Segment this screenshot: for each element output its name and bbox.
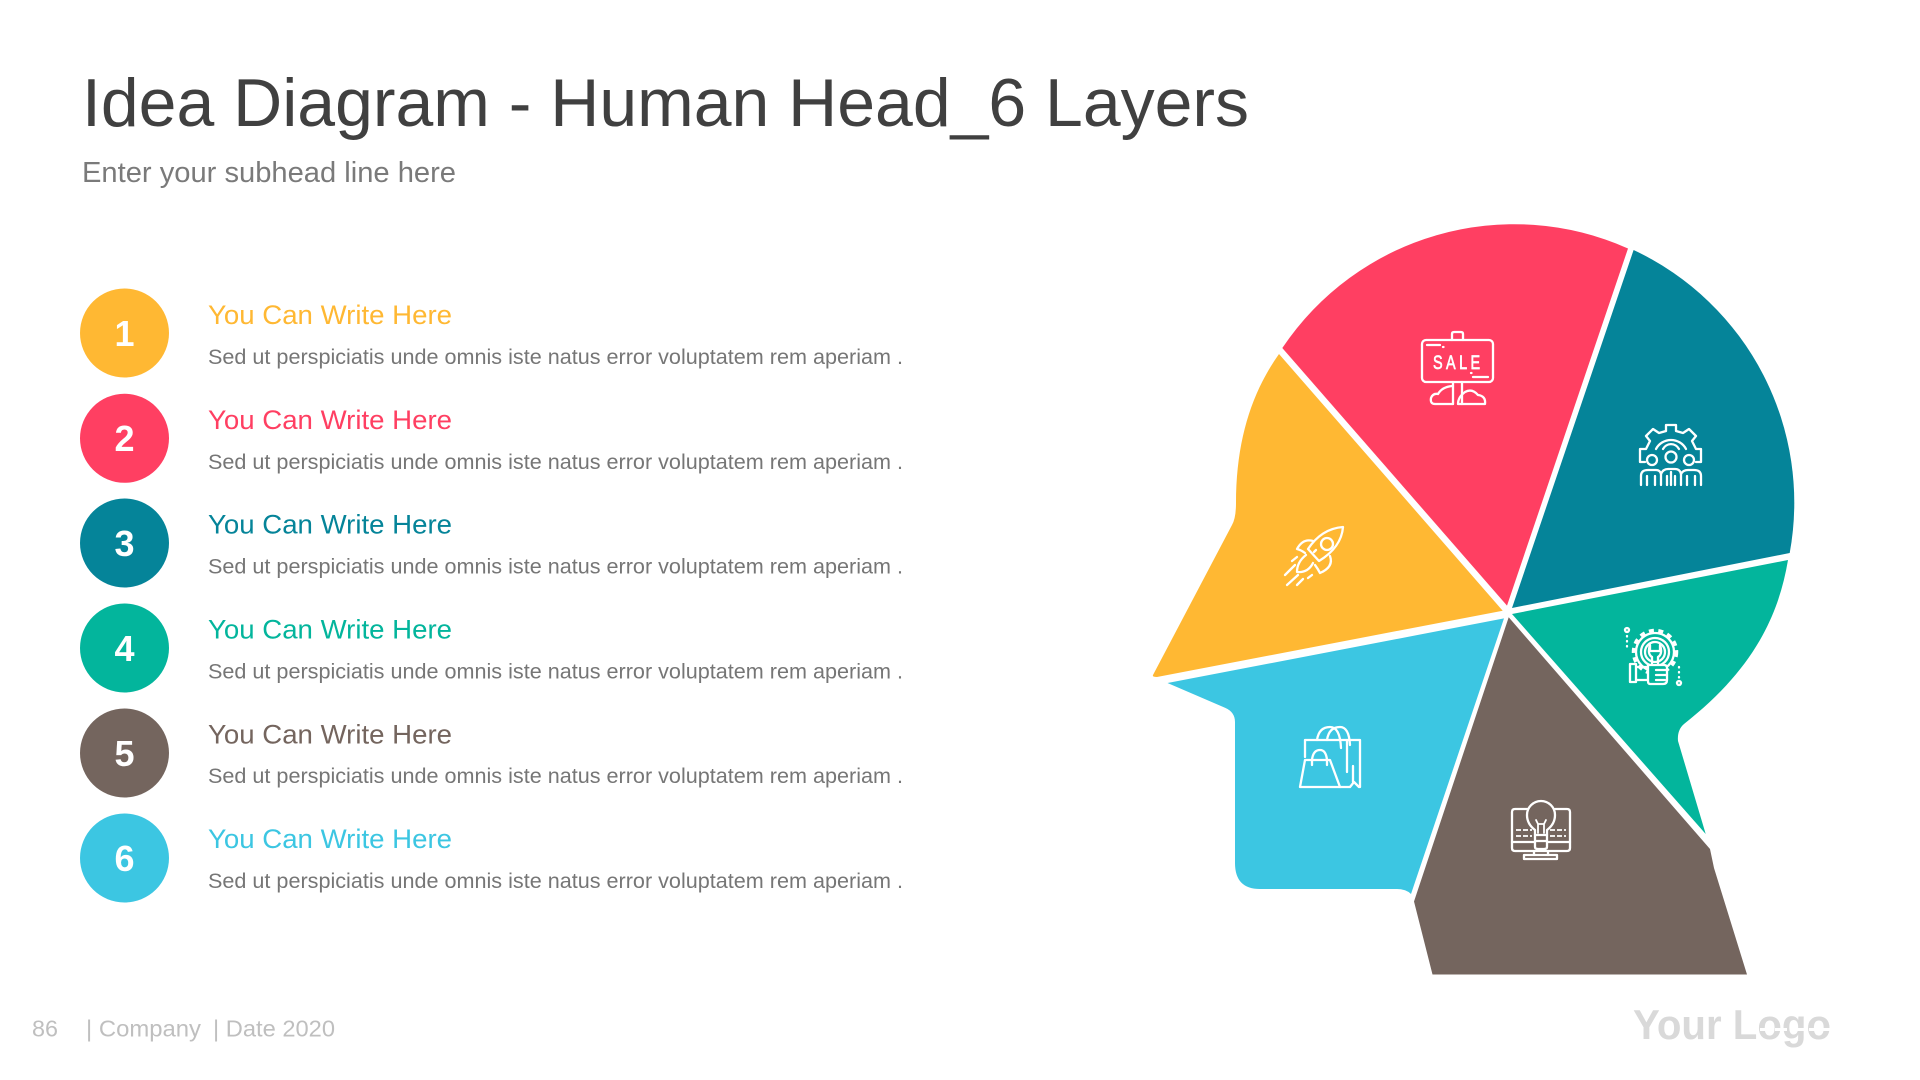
icon: bulb on monitor — [1512, 801, 1570, 859]
item 3: Sed ut perspiciatis unde omnis iste natus error voluptatem rem aperiam . — [208, 556, 903, 578]
item 4 — [80, 604, 903, 692]
item 5: Sed ut perspiciatis unde omnis iste natus error voluptatem rem aperiam . — [208, 765, 903, 788]
segment: green — [1512, 560, 1788, 834]
item 3: 3 — [114, 523, 135, 564]
segment: red — [1282, 224, 1628, 606]
icon: sale sign — [1422, 332, 1493, 404]
icon: shopping bags — [1300, 727, 1360, 787]
item 5: 5 — [114, 733, 135, 774]
icon: wrench in gear with hand — [1625, 628, 1681, 685]
list of six items — [80, 288, 903, 902]
icon: rocket — [1285, 527, 1343, 585]
footer: page number: 86 — [32, 1016, 58, 1042]
item 6: Sed ut perspiciatis unde omnis iste natus error voluptatem rem aperiam . — [208, 870, 903, 893]
item 6 — [80, 814, 903, 902]
item 4: Sed ut perspiciatis unde omnis iste natus error voluptatem rem aperiam . — [208, 660, 903, 683]
logo: Your Logo — [1633, 1001, 1831, 1048]
footer: date: | Date 2020 — [213, 1016, 335, 1042]
item 1: 1 — [114, 313, 135, 354]
subtitle: Enter your subhead line here — [82, 157, 456, 189]
item 2: 2 — [114, 418, 135, 459]
item 1: You Can Write Here — [208, 300, 452, 330]
item 2 — [80, 394, 903, 483]
footer: company: | Company — [86, 1016, 202, 1042]
item 1 — [80, 288, 903, 378]
title: Idea Diagram - Human Head_6 Layers — [82, 65, 1249, 141]
segment: yellow — [1153, 354, 1503, 677]
segment: brown — [1414, 617, 1747, 974]
human head diagram — [1153, 224, 1794, 974]
icon: gear with people — [1640, 425, 1701, 485]
item 3 — [80, 498, 903, 588]
icon: sale sign: SALE — [1433, 351, 1484, 374]
item 1: Sed ut perspiciatis unde omnis iste natus error voluptatem rem aperiam . — [208, 346, 903, 369]
item 2: Sed ut perspiciatis unde omnis iste natus error voluptatem rem aperiam . — [208, 451, 903, 474]
segment: blue — [1168, 618, 1504, 894]
item 6: You Can Write Here — [208, 824, 452, 854]
item 4: 4 — [114, 628, 135, 669]
item 5: You Can Write Here — [208, 719, 452, 749]
item 5 — [80, 708, 903, 798]
item 3: You Can Write Here — [208, 510, 452, 540]
segment: teal — [1512, 250, 1794, 608]
item 6: 6 — [114, 838, 135, 879]
item 4: You Can Write Here — [208, 614, 452, 644]
item 2: You Can Write Here — [208, 405, 452, 435]
